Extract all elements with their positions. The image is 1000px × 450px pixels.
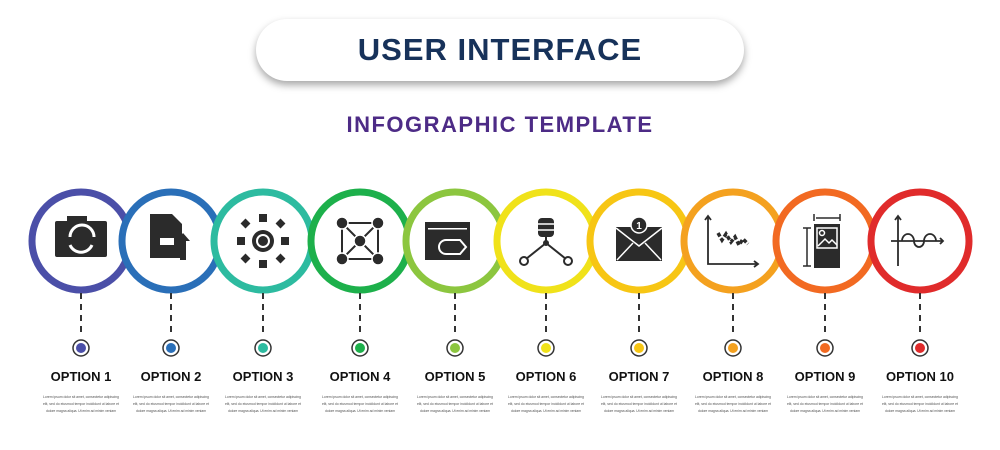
icon: camera rotate [55, 216, 107, 257]
option 9: elit, sed do eiusmod tempor incididunt ut labore et [787, 402, 863, 406]
option 10: Lorem ipsum dolor sit amet, consectetur adipiscing [882, 395, 958, 399]
option 1 [32, 192, 130, 413]
icon: database network [538, 218, 554, 246]
option 8: dolore magna aliqua. Ut enim ad minim veniam [698, 409, 768, 413]
icon: mail notification [616, 227, 662, 261]
option 2: Lorem ipsum dolor sit amet, consectetur adipiscing [133, 395, 209, 399]
option 7 [590, 192, 688, 413]
option 7: dolore magna aliqua. Ut enim ad minim veniam [604, 409, 674, 413]
option 4: Lorem ipsum dolor sit amet, consectetur adipiscing [322, 395, 398, 399]
title [256, 19, 744, 81]
option 8 [684, 192, 782, 413]
option 1: dolore magna aliqua. Ut enim ad minim veniam [46, 409, 116, 413]
option 6: elit, sed do eiusmod tempor incididunt ut labore et [508, 402, 584, 406]
option 7: Lorem ipsum dolor sit amet, consectetur adipiscing [601, 395, 677, 399]
option 9: Lorem ipsum dolor sit amet, consectetur adipiscing [787, 395, 863, 399]
option 7: OPTION 7 [609, 369, 669, 384]
option 4: dolore magna aliqua. Ut enim ad minim veniam [325, 409, 395, 413]
option 1: elit, sed do eiusmod tempor incididunt ut labore et [43, 402, 119, 406]
option 10: elit, sed do eiusmod tempor incididunt ut labore et [882, 402, 958, 406]
option 4: OPTION 4 [330, 369, 391, 384]
option 5: Lorem ipsum dolor sit amet, consectetur adipiscing [417, 395, 493, 399]
option 10 [871, 192, 969, 413]
option 5: dolore magna aliqua. Ut enim ad minim veniam [420, 409, 490, 413]
option 6: OPTION 6 [516, 369, 576, 384]
option 10: dolore magna aliqua. Ut enim ad minim veniam [885, 409, 955, 413]
option 9: dolore magna aliqua. Ut enim ad minim veniam [790, 409, 860, 413]
option 6: dolore magna aliqua. Ut enim ad minim veniam [511, 409, 581, 413]
option 1: OPTION 1 [51, 369, 111, 384]
option 6: Lorem ipsum dolor sit amet, consectetur adipiscing [508, 395, 584, 399]
option 10: OPTION 10 [886, 369, 954, 384]
icon: chart [705, 216, 758, 267]
option 9 [776, 192, 874, 413]
option 3: dolore magna aliqua. Ut enim ad minim veniam [228, 409, 298, 413]
option 9: OPTION 9 [795, 369, 855, 384]
icon: network users [342, 223, 378, 259]
option 7: 1 [636, 221, 642, 232]
option 8: elit, sed do eiusmod tempor incididunt ut labore et [695, 402, 771, 406]
option 2 [122, 192, 220, 413]
option 5 [406, 192, 504, 413]
icon: floppy upload [150, 214, 190, 260]
option 5: elit, sed do eiusmod tempor incididunt ut labore et [417, 402, 493, 406]
option 3: elit, sed do eiusmod tempor incididunt ut labore et [225, 402, 301, 406]
option 4 [311, 192, 409, 413]
icon: sine wave [891, 216, 943, 266]
option 6 [497, 192, 595, 413]
option 2: elit, sed do eiusmod tempor incididunt ut labore et [133, 402, 209, 406]
option 2: dolore magna aliqua. Ut enim ad minim veniam [136, 409, 206, 413]
option 2: OPTION 2 [141, 369, 201, 384]
option 4: elit, sed do eiusmod tempor incididunt ut labore et [322, 402, 398, 406]
option 8: Lorem ipsum dolor sit amet, consectetur adipiscing [695, 395, 771, 399]
icon: browser login [425, 222, 470, 260]
icon: hub [237, 214, 289, 268]
option 5: OPTION 5 [425, 369, 485, 384]
icon: image dimensions [814, 224, 840, 268]
option 3: OPTION 3 [233, 369, 293, 384]
option 3 [214, 192, 312, 413]
title: USER INTERFACE [358, 32, 642, 67]
option 8: OPTION 8 [703, 369, 763, 384]
option 3: Lorem ipsum dolor sit amet, consectetur adipiscing [225, 395, 301, 399]
option 7: elit, sed do eiusmod tempor incididunt ut labore et [601, 402, 677, 406]
option 1: Lorem ipsum dolor sit amet, consectetur adipiscing [43, 395, 119, 399]
subtitle: INFOGRAPHIC TEMPLATE [346, 112, 654, 137]
